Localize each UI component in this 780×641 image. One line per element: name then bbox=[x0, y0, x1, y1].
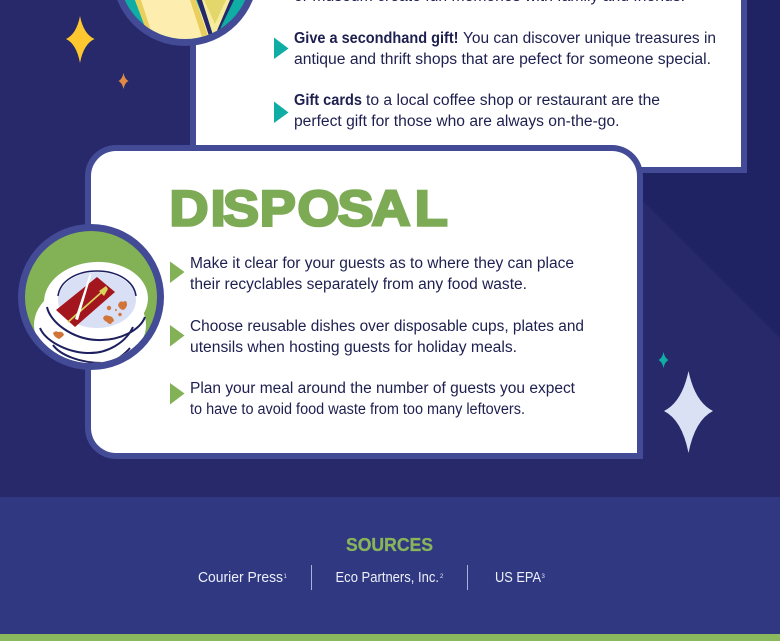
icon: dirty plates bbox=[18, 224, 164, 370]
gift tip: gift cards bbox=[274, 92, 660, 130]
icon: sparkle gold bbox=[66, 16, 94, 63]
disposal tip: reusable dishes: Choose reusable dishes over disposable cups, plates and bbox=[190, 318, 584, 335]
disposal tip: plan meal bbox=[170, 380, 576, 418]
disposal tip: reusable dishes: utensils when hosting guests for holiday meals. bbox=[190, 339, 517, 356]
gift tip: secondhand: antique and thrift shops that are pefect for someone special. bbox=[294, 51, 711, 68]
gift tip: secondhand bbox=[274, 30, 716, 68]
gift tip: gift cards: Gift cards bbox=[294, 92, 362, 109]
source: courier press: Courier Press bbox=[198, 570, 283, 586]
disposal tip: recyclables: their recyclables separately from any food waste. bbox=[190, 276, 527, 293]
disposal tip: plan meal: to have to avoid food waste from too many leftovers. bbox=[190, 401, 525, 418]
gift tip: gift cards: to a local coffee shop or restaurant are the bbox=[366, 92, 660, 109]
gift tip: secondhand: You can discover unique treasures in bbox=[463, 30, 716, 47]
source: courier press: 1 bbox=[284, 574, 288, 580]
panel: sources footer bbox=[0, 497, 780, 634]
source: us epa: US EPA bbox=[495, 570, 541, 586]
green bottom band bbox=[0, 634, 780, 641]
heading: sources: SOURCES bbox=[346, 534, 433, 555]
icon: sparkle orange bbox=[118, 73, 128, 89]
heading: disposal: DISPOSAL bbox=[170, 181, 448, 237]
source: eco partners: Eco Partners, Inc. bbox=[336, 570, 439, 586]
gift tip: secondhand: Give a secondhand gift! bbox=[294, 30, 458, 47]
disposal tip: recyclables bbox=[170, 255, 574, 293]
icon: sparkle white bbox=[664, 371, 713, 453]
disposal tip: recyclables: Make it clear for your guests as to where they can place bbox=[190, 255, 574, 272]
disposal tip: plan meal: Plan your meal around the number of guests you expect bbox=[190, 380, 576, 397]
disposal tip: reusable dishes bbox=[170, 318, 584, 356]
icon: gift circle bbox=[117, 0, 253, 46]
source: us epa: 3 bbox=[542, 574, 546, 580]
panel: disposal card bbox=[85, 145, 643, 459]
source: eco partners: 2 bbox=[440, 574, 444, 580]
icon: sparkle teal bbox=[658, 352, 668, 368]
gift tip: gift cards: perfect gift for those who are always on-the-go. bbox=[294, 113, 620, 130]
panel: gifts card bbox=[190, 0, 747, 173]
